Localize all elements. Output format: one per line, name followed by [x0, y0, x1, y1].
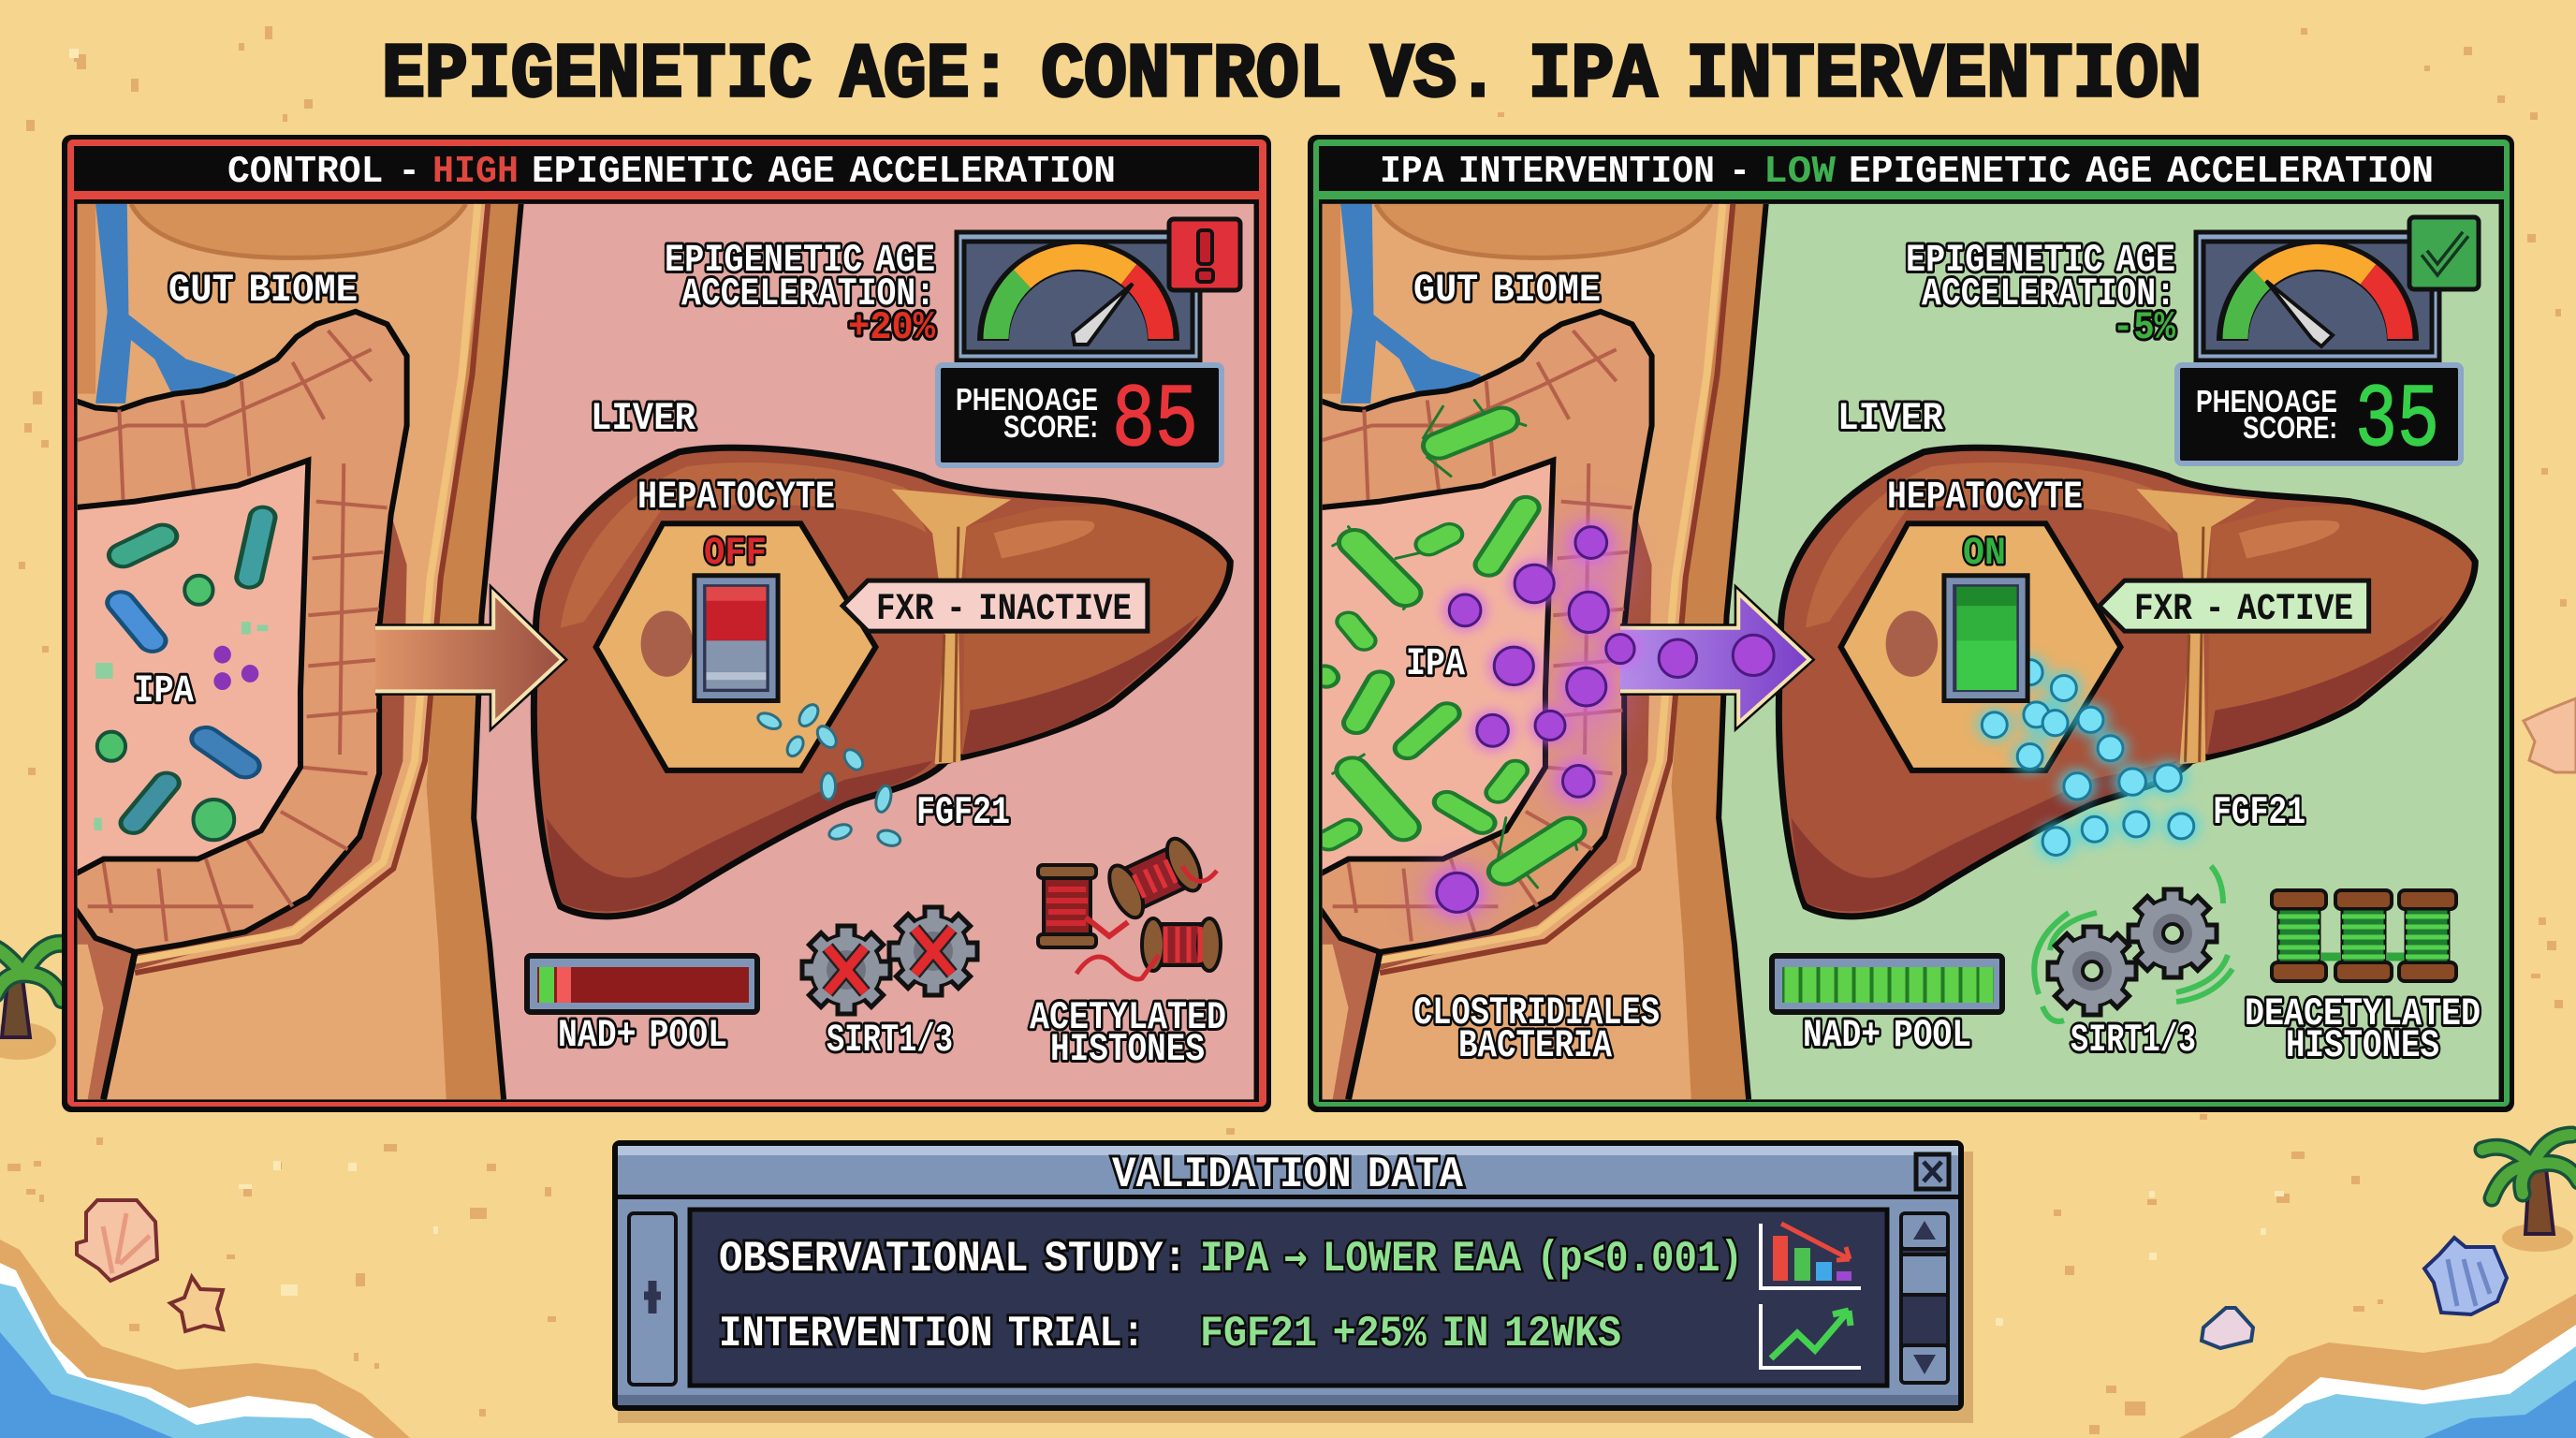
line chart icon: [1761, 1304, 1861, 1368]
header text: EPIGENETIC AGE ACCELERATION: [1849, 151, 2434, 194]
icon: alert: [1169, 219, 1240, 290]
label: clostridiales bacteria: CLOSTRIDIALES: [1413, 990, 1660, 1035]
icon: inactive gears: [802, 907, 977, 1014]
header text: [227, 151, 1116, 194]
title: EPIGENETIC AGE: CONTROL VS. IPA INTERVENTION: [382, 32, 2202, 119]
label: NAD pool: NAD+ POOL: [558, 1013, 727, 1058]
label: deacetylated histones: DEACETYLATED: [2245, 991, 2481, 1036]
header text: HIGH: [432, 151, 519, 194]
label: on: ON: [1963, 531, 2006, 576]
PhenoAge score box: 85: [1112, 370, 1198, 472]
label: acetylated histones: HISTONES: [1050, 1027, 1205, 1072]
header text: CONTROL -: [227, 151, 420, 194]
label: deacetylated histones: [2245, 991, 2481, 1068]
header text: EPIGENETIC AGE ACCELERATION: [532, 151, 1116, 194]
panel: IPA intervention: [1301, 135, 2537, 1114]
callout FXR inactive box: [842, 580, 1148, 631]
label: epigenetic age acceleration: ACCELERATION:: [1922, 271, 2175, 316]
label: epigenetic age acceleration: -5%: [2113, 305, 2176, 350]
FGF21 molecules sparse: [754, 702, 903, 849]
PhenoAge score box: [2177, 365, 2461, 472]
PhenoAge score box: PHENOAGE: [2196, 384, 2337, 418]
IPA molecules: [1432, 522, 1774, 917]
PhenoAge score box: PHENOAGE: [956, 382, 1098, 417]
label: epigenetic age acceleration: EPIGENETIC AGE: [665, 238, 935, 283]
water bottom right: [2179, 1294, 2576, 1438]
panel: validation data window: [612, 1140, 1973, 1423]
PhenoAge score box: SCORE:: [2243, 410, 2337, 445]
starfish: [170, 1277, 223, 1331]
label: SIRT: SIRT1/3: [827, 1018, 953, 1063]
label: hepatocyte: HEPATOCYTE: [1887, 475, 2083, 520]
panel: control: [56, 135, 1292, 1114]
toggle switch off: [695, 576, 778, 701]
FGF21 molecules abundant: [1977, 655, 2199, 860]
shell left: [77, 1200, 157, 1281]
label: epigenetic age acceleration: [1906, 238, 2176, 350]
data display: [690, 1210, 1887, 1386]
header text: LOW: [1764, 151, 1836, 194]
glow in intestine wall: [1422, 514, 1624, 924]
icon: ordered spools: [2272, 890, 2456, 981]
gut bacteria sparse: [121, 517, 263, 823]
small pebble shell: [2202, 1308, 2253, 1348]
close button: [1916, 1154, 1949, 1189]
label: clostridiales bacteria: BACTERIA: [1458, 1023, 1613, 1068]
header text: [1380, 151, 2434, 194]
left scrollbar: [629, 1213, 676, 1385]
PhenoAge score box: [938, 365, 1222, 472]
gauge: [957, 232, 1200, 360]
label: gut biome: GUT BIOME: [168, 268, 358, 313]
icon: loose spools: [1038, 834, 1221, 979]
bar chart icon: [1761, 1224, 1861, 1288]
panel background and anatomy: [1301, 185, 2537, 1114]
PhenoAge score box: SCORE:: [1003, 409, 1098, 444]
PhenoAge score box: 35: [2355, 370, 2439, 472]
header text: IPA INTERVENTION -: [1380, 151, 1750, 194]
label: FXR inactive: FXR - INACTIVE: [876, 589, 1132, 631]
label: SIRT: SIRT1/3: [2071, 1018, 2196, 1063]
study row text: [719, 1230, 1743, 1284]
label: epigenetic age acceleration: EPIGENETIC AGE: [1906, 238, 2175, 283]
label: FGF21: FGF21: [916, 790, 1010, 835]
label: epigenetic age acceleration: ACCELERATION:: [681, 271, 935, 316]
window title: VALIDATION DATA: [1112, 1151, 1463, 1199]
arrow with IPA: [1620, 594, 1809, 723]
palm tree right: [2482, 1135, 2576, 1252]
trial row text: [719, 1310, 1621, 1358]
label: acetylated histones: [1030, 995, 1226, 1072]
panel background and anatomy: [56, 185, 1292, 1114]
shell at right edge: [2524, 698, 2576, 772]
label: liver: LIVER: [591, 396, 696, 441]
callout FXR active box: [2100, 580, 2369, 631]
label: liver: LIVER: [1837, 396, 1944, 441]
water bottom left: [0, 1240, 410, 1438]
toggle switch on: [1944, 576, 2027, 701]
label: FXR active: FXR - ACTIVE: [2134, 589, 2353, 631]
study row text: IPA → LOWER EAA (p<0.001): [1200, 1230, 1743, 1284]
arrow muted: [375, 594, 562, 723]
study row text: OBSERVATIONAL STUDY:: [719, 1235, 1187, 1284]
label: epigenetic age acceleration: +20%: [848, 305, 936, 350]
icon: active gears: [2034, 866, 2232, 1021]
palm tree left: [0, 944, 64, 1060]
trial row text: FGF21 +25% IN 12WKS: [1200, 1310, 1621, 1358]
label: FGF21: FGF21: [2213, 790, 2305, 835]
shell blue: [2424, 1238, 2507, 1314]
label: clostridiales bacteria: [1413, 990, 1660, 1068]
NAD+ bar low: [527, 956, 757, 1012]
label: deacetylated histones: HISTONES: [2286, 1023, 2439, 1068]
icon: check: [2409, 217, 2479, 289]
clostridiales bacteria: [1325, 400, 1577, 888]
NAD+ bar full: [1772, 956, 2002, 1012]
label: IPA: IPA: [1406, 641, 1466, 686]
trial row text: INTERVENTION TRIAL:: [719, 1310, 1145, 1358]
label: hepatocyte: HEPATOCYTE: [637, 475, 835, 520]
label: acetylated histones: ACETYLATED: [1030, 995, 1226, 1040]
right scrollbar: [1901, 1213, 1948, 1383]
label: NAD pool: NAD+ POOL: [1803, 1013, 1971, 1058]
label: gut biome: GUT BIOME: [1413, 268, 1601, 313]
label: epigenetic age acceleration: [665, 238, 936, 350]
gauge: [2196, 232, 2439, 360]
label: off: OFF: [704, 531, 767, 576]
label: IPA: IPA: [134, 668, 195, 713]
